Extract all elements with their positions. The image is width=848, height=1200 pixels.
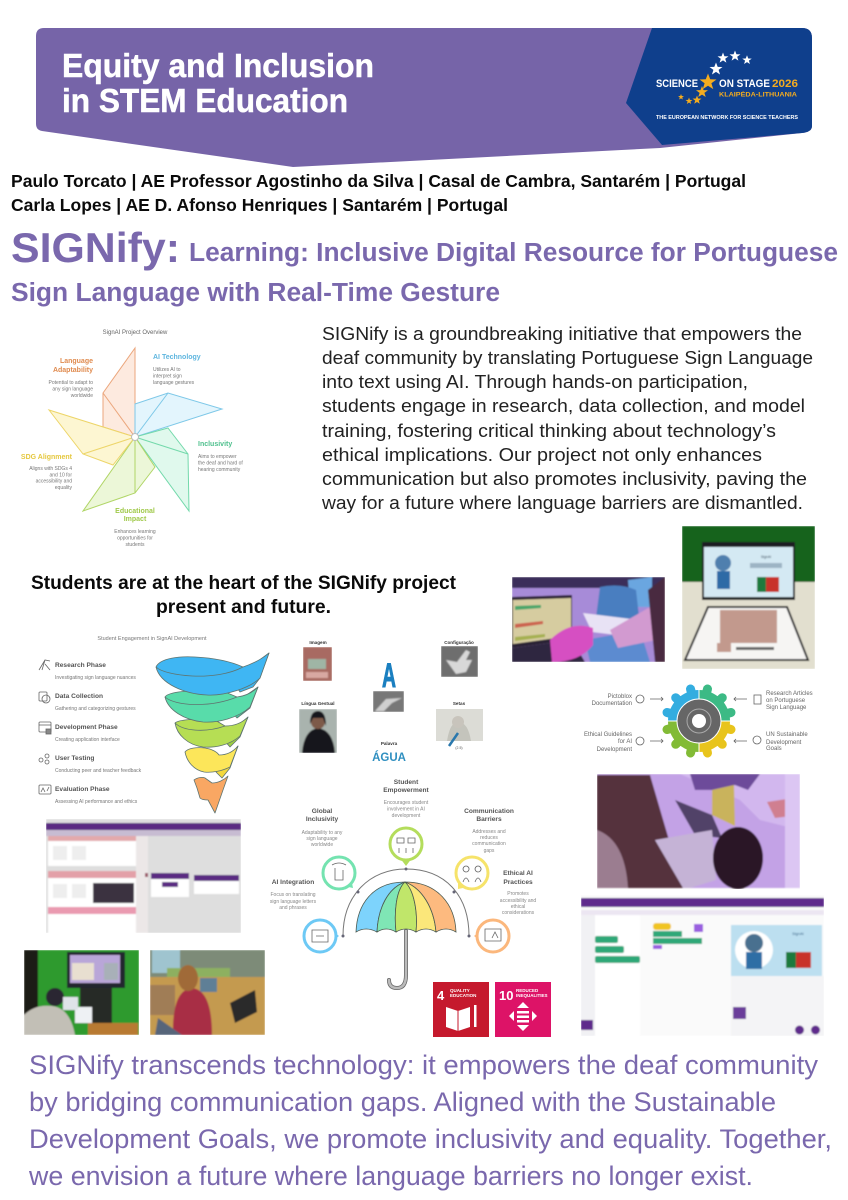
photo: two students at laptop <box>597 774 800 889</box>
blade: educational impact: Educational <box>115 508 155 515</box>
text: ethical AI practices: considerations <box>502 910 535 916</box>
text: AI integration: AI Integration <box>272 879 314 886</box>
text: student empowerment: Empowerment <box>383 787 430 794</box>
image: signer <box>299 709 337 753</box>
funnel diagram: student engagement: Student Engagement in SignAI Development <box>97 636 207 642</box>
blade: inclusivity <box>135 428 243 511</box>
photo: hands on laptop with blue chair <box>512 577 665 662</box>
label: pictoblox documentation: Documentation <box>592 701 632 707</box>
SDG 10 badge: REDUCED <box>516 988 539 993</box>
sign language elements diagram <box>299 640 483 764</box>
text: AI integration: and phrases <box>279 905 307 911</box>
label: UN goals: UN Sustainable <box>766 732 808 738</box>
icon circle: communication barriers <box>456 857 488 889</box>
gear <box>661 683 737 759</box>
text: ethical AI practices: Practices <box>503 879 533 886</box>
intro paragraph: training, fostering critical thinking about technology’s <box>322 420 776 441</box>
phase list <box>55 662 142 805</box>
icon circle: student empowerment <box>390 828 422 866</box>
label: imagem: Imagem <box>309 640 327 645</box>
blade: AI technology: interpret sign <box>153 374 182 380</box>
label: palavra: Palavra <box>381 741 398 746</box>
label: UN goals: Development <box>766 740 802 746</box>
conference logo panel: ON STAGE <box>719 78 770 90</box>
label: UN goals <box>766 732 808 752</box>
arc <box>343 869 469 936</box>
intro paragraph: students engage in research, data collection, and model <box>322 395 805 416</box>
project title: SIGNify: <box>11 224 180 271</box>
label: pictoblox documentation <box>592 694 632 707</box>
blade: inclusivity: Aims to empower <box>198 454 237 460</box>
closing statement: Development Goals, we promote inclusivity and equality. Together, <box>29 1124 832 1154</box>
SDG 4 badge: QUALITY <box>450 988 470 993</box>
phase list: Data Collection <box>55 693 103 700</box>
students heading: Students are at the heart of the SIGNify project <box>31 573 457 594</box>
arrows and icons <box>636 695 761 745</box>
text: global inclusivity: Global <box>312 808 332 815</box>
blade: language adaptability: Language <box>60 358 93 365</box>
project title: Learning: Inclusive Digital Resource for Portuguese <box>189 239 838 267</box>
word: agua: ÁGUA <box>372 751 406 764</box>
blade: educational impact: students <box>126 542 145 548</box>
blade: language adaptability <box>49 348 135 437</box>
orange band <box>194 776 228 813</box>
SDG 4 badge: EDUCATION <box>450 993 476 998</box>
blue band <box>156 653 269 695</box>
label: ethical guidelines: Ethical Guidelines <box>584 732 632 738</box>
arc dots <box>342 868 470 938</box>
label: configuracao: Configuração <box>444 640 474 645</box>
label: ethical guidelines <box>584 732 632 753</box>
intro paragraph: way for a future where language barriers are dismantled. <box>321 492 803 513</box>
text: student empowerment: Encourages student <box>384 800 429 806</box>
students heading: present and future. <box>156 597 331 618</box>
text: ethical AI practices: ethical <box>511 904 525 910</box>
SDG 4 badge: 4 <box>437 988 445 1003</box>
SDG 4 badge <box>433 982 489 1037</box>
label: research articles: on Portuguese <box>766 698 806 704</box>
umbrella diagram <box>270 779 536 988</box>
lime band <box>175 717 248 747</box>
text: communication barriers: reduces <box>480 835 498 841</box>
blade: inclusivity: Inclusivity <box>198 441 232 448</box>
label: pictoblox documentation: Pictoblox <box>608 694 632 700</box>
phase icons <box>39 660 51 794</box>
blade: AI technology: language gestures <box>153 380 195 386</box>
text: AI integration <box>270 879 317 911</box>
image: pointing hand <box>373 691 404 712</box>
pinwheel diagram: project overview: SignAI Project Overview <box>103 330 168 336</box>
phase list: Research Phase <box>55 662 106 669</box>
project title: Sign Language with Real-Time Gesture <box>11 279 500 307</box>
blade: language adaptability: any sign language <box>52 386 93 392</box>
label: ethical guidelines: for AI <box>618 739 632 745</box>
text: student empowerment: Student <box>394 779 419 786</box>
screenshot: pictoblox with SignAI project <box>581 895 824 1036</box>
label: ethical guidelines: Development <box>597 747 632 753</box>
canopy <box>356 882 456 932</box>
blade: educational impact: opportunities for <box>117 536 153 542</box>
SDG 10 badge: 10 <box>499 988 513 1003</box>
intro paragraph: SIGNify is a groundbreaking initiative that empowers the <box>322 323 802 344</box>
blade: educational impact: Impact <box>124 516 147 523</box>
phase list: Creating application interface <box>55 737 120 743</box>
text: communication barriers: Addresses and <box>472 829 506 835</box>
blade: inclusivity: hearing community <box>198 467 241 473</box>
text: global inclusivity: worldwide <box>311 842 333 848</box>
blade: inclusivity: the deaf and hard of <box>198 460 243 466</box>
text: ethical AI practices <box>500 870 536 916</box>
intro paragraph: deaf community by translating Portuguese Sign Language <box>322 347 813 368</box>
text: student empowerment: involvement in AI <box>387 806 425 812</box>
authors: Paulo Torcato | AE Professor Agostinho da Silva | Casal de Cambra, Santarém | Portugal <box>11 171 746 191</box>
text: global inclusivity <box>302 808 343 848</box>
phase list: Investigating sign language nuances <box>55 675 136 681</box>
phase list: User Testing <box>55 755 94 762</box>
closing statement: we envision a future where language barriers no longer exist. <box>28 1161 753 1191</box>
blade: language adaptability: worldwide <box>71 393 93 399</box>
yellow band <box>185 746 238 778</box>
title: in STEM Education <box>62 82 348 119</box>
phase list: Conducting peer and teacher feedback <box>55 768 142 774</box>
photo: teacher in classroom <box>150 950 265 1035</box>
icon: letter A: A <box>382 657 396 695</box>
green band <box>165 687 258 722</box>
phase list: Assessing AI performance and ethics <box>55 799 138 805</box>
conference logo panel <box>626 28 812 145</box>
phase list: Gathering and categorizing gestures <box>55 706 136 712</box>
blade: language adaptability: Potential to adapt to <box>49 380 93 386</box>
screenshot: pictoblox with SignAI project: SignAI <box>792 931 804 936</box>
blade: educational impact: Enhances learning <box>114 529 156 535</box>
handle <box>389 931 406 988</box>
text: AI integration: Focus on translating <box>270 892 316 898</box>
blade: SDG alignment: and 10 for <box>49 472 72 478</box>
text: communication barriers: Barriers <box>476 816 502 823</box>
closing statement <box>28 1050 832 1191</box>
intro paragraph <box>321 323 813 513</box>
blade: SDG alignment <box>21 410 135 491</box>
label: research articles <box>766 691 813 711</box>
text: ethical AI practices: Promotes <box>507 891 529 897</box>
conference logo panel: KLAIPĖDA-LITHUANIA <box>719 90 797 98</box>
label: setas: Setas <box>453 701 466 706</box>
text: student empowerment: development <box>392 813 421 819</box>
blade: language adaptability: Adaptability <box>53 367 93 374</box>
closing statement: SIGNify transcends technology: it empowers the deaf community <box>29 1050 819 1080</box>
students heading <box>31 573 457 618</box>
image: hand shape <box>441 646 478 677</box>
text: communication barriers: communication <box>472 841 506 847</box>
text: student empowerment <box>383 779 430 819</box>
intro paragraph: ethical implications. Our project not only enhances <box>322 444 762 465</box>
pinwheel diagram: project overview <box>21 330 243 548</box>
SDG 10 badge <box>495 982 551 1037</box>
text: global inclusivity: sign language <box>306 836 338 842</box>
label: research articles: Sign Language <box>766 705 807 711</box>
blade: AI technology <box>135 354 222 437</box>
text: communication barriers <box>464 808 514 854</box>
blade: AI technology: AI Technology <box>153 354 201 361</box>
funnel diagram: student engagement <box>39 636 269 813</box>
label: research articles: Research Articles <box>766 691 813 697</box>
header banner <box>36 28 812 167</box>
text: AI integration: sign language letters <box>270 899 317 905</box>
blade: SDG alignment: SDG Alignment <box>21 454 73 461</box>
text: ethical AI practices: accessibility and <box>500 898 536 904</box>
conference logo panel: THE EUROPEAN NETWORK FOR SCIENCE TEACHERS <box>656 115 798 121</box>
blade: SDG alignment: Aligns with SDGs 4 <box>29 466 72 472</box>
photo: laptop-shaped printed resource <box>682 526 815 669</box>
gear diagram <box>584 683 813 759</box>
intro paragraph: into text using AI. Through hands-on participation, <box>322 371 748 392</box>
authors: Carla Lopes | AE D. Afonso Henriques | Santarém | Portugal <box>11 195 508 215</box>
blade: SDG alignment: equality <box>55 485 72 491</box>
label: lingua gestual: Língua Gestual <box>301 701 335 706</box>
title: Equity and Inclusion <box>62 47 374 84</box>
image: arrows over signer: (2.5) <box>455 746 463 750</box>
text: communication barriers: Communication <box>464 808 514 815</box>
text: ethical AI practices: Ethical AI <box>503 870 533 877</box>
icon circle: ethical AI <box>474 920 509 952</box>
blade: educational impact <box>83 437 156 548</box>
label: UN goals: Goals <box>766 746 782 752</box>
text: global inclusivity: Adaptability to any <box>302 830 343 836</box>
screenshot: machine learning environment <box>46 819 241 933</box>
image: arrows over signer <box>436 709 483 750</box>
blade: AI technology: Utilizes AI to <box>153 367 181 373</box>
intro paragraph: communication but also promotes inclusivity, paving the <box>322 468 807 489</box>
icon circle: AI integration <box>304 920 339 952</box>
photo: student with class screen <box>24 950 139 1035</box>
blade: SDG alignment: accessibility and <box>36 478 72 484</box>
photo: laptop-shaped printed resource: SignAI <box>761 555 771 559</box>
phase list: Development Phase <box>55 724 118 731</box>
authors <box>11 171 746 215</box>
conference logo panel: 2026 <box>772 78 798 90</box>
title <box>62 47 374 119</box>
text: global inclusivity: Inclusivity <box>306 816 338 823</box>
image: picture of hands <box>303 647 332 681</box>
SDG 10 badge: INEQUALITIES <box>516 993 548 998</box>
phase list: Evaluation Phase <box>55 786 110 793</box>
conference logo panel: SCIENCE <box>656 78 698 90</box>
project title <box>11 224 838 307</box>
icon circle: global inclusivity <box>323 857 355 889</box>
banner purple shape <box>36 28 812 167</box>
text: communication barriers: gaps <box>484 848 495 854</box>
funnel bands <box>156 653 269 813</box>
closing statement: by bridging communication gaps. Aligned with the Sustainable <box>29 1087 776 1117</box>
